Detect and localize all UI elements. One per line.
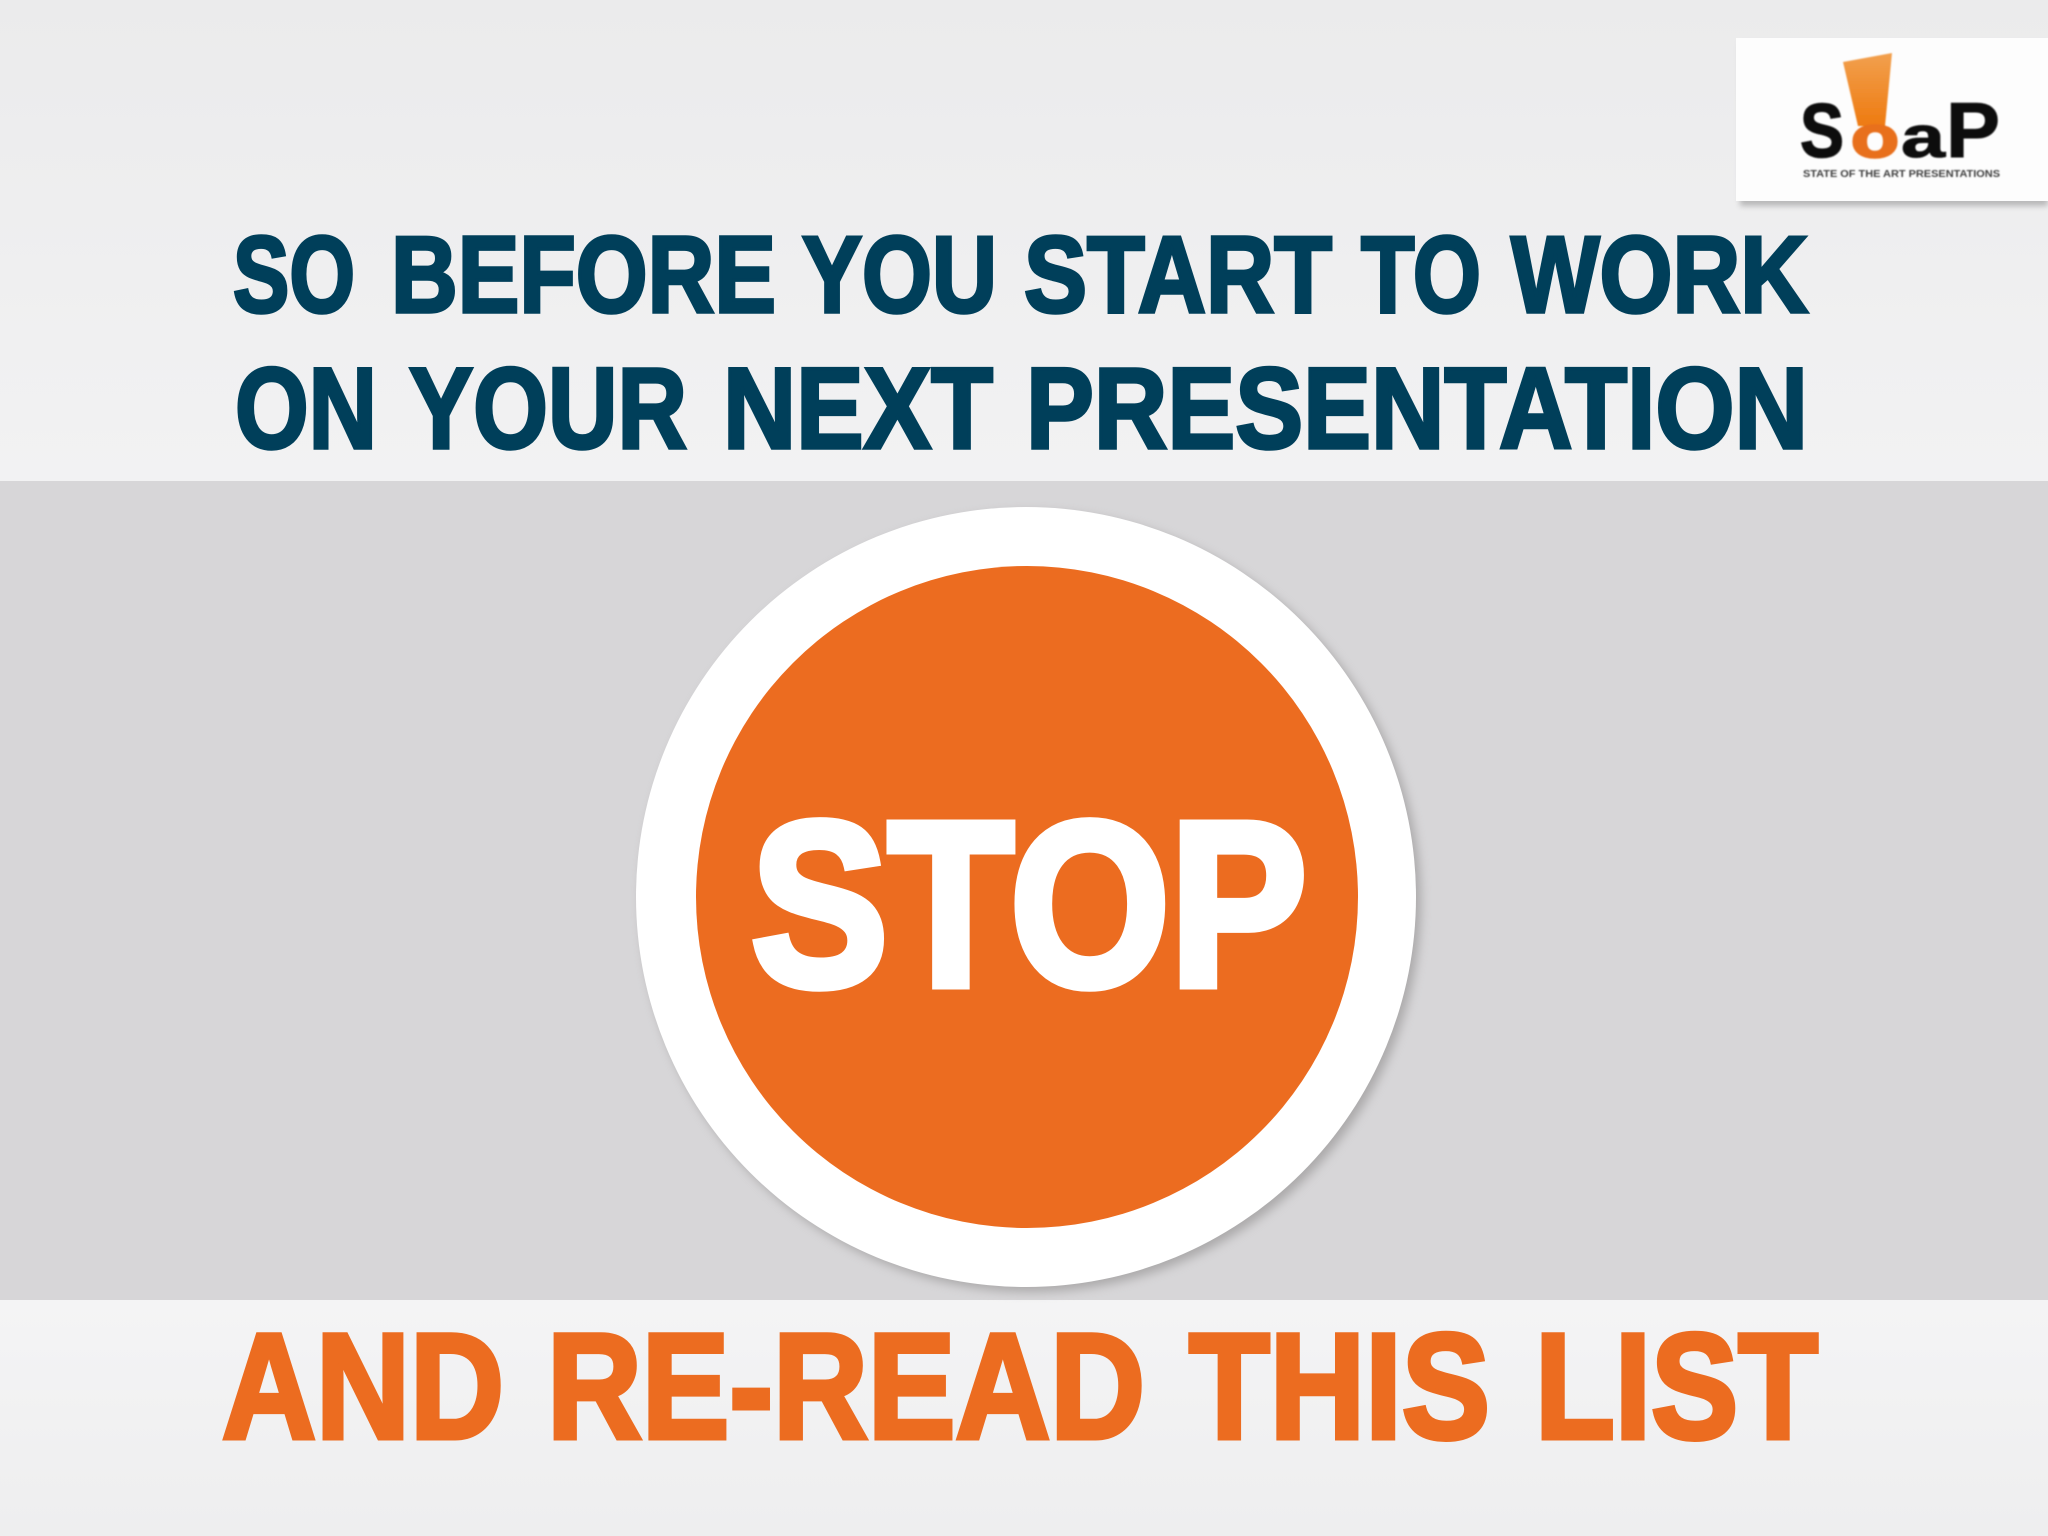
heading line 1: WORK <box>1511 214 1808 336</box>
sign word: STOP <box>751 773 1307 1035</box>
heading line 2: PRESENTATION <box>1026 345 1808 473</box>
heading line 2: YOUR <box>409 345 687 473</box>
closing line: THIS <box>1189 1302 1490 1470</box>
sign orange disc <box>696 566 1358 1228</box>
logo mark <box>1800 53 2000 180</box>
closing line: LIST <box>1535 1302 1818 1470</box>
stop sign <box>636 507 1421 1292</box>
sign white ring <box>636 507 1416 1287</box>
logo mark: o <box>1851 105 1899 170</box>
heading line 2: ON <box>235 345 377 473</box>
heading line 1: YOU <box>802 214 997 336</box>
logo mark: P <box>1946 86 2000 174</box>
heading line 2 <box>235 345 1808 473</box>
heading line 1: START <box>1024 214 1332 336</box>
closing line: AND <box>222 1302 504 1470</box>
sign shadow <box>641 512 1421 1292</box>
heading line 1: BEFORE <box>391 214 776 336</box>
logo mark: STATE OF THE ART PRESENTATIONS <box>1803 169 2000 180</box>
logo mark: a <box>1901 105 1946 170</box>
logo mark: S <box>1800 89 1844 174</box>
background: bottom area <box>0 1300 2048 1536</box>
grey central band <box>0 481 2048 1300</box>
closing line <box>222 1302 1818 1470</box>
heading line 1 <box>233 214 1808 336</box>
heading line 1: TO <box>1361 214 1481 336</box>
background: top area <box>0 0 2048 481</box>
heading line 2: NEXT <box>723 345 993 473</box>
closing line: RE-READ <box>547 1302 1145 1470</box>
heading line 1: SO <box>233 214 355 336</box>
logo panel <box>1736 38 2048 206</box>
